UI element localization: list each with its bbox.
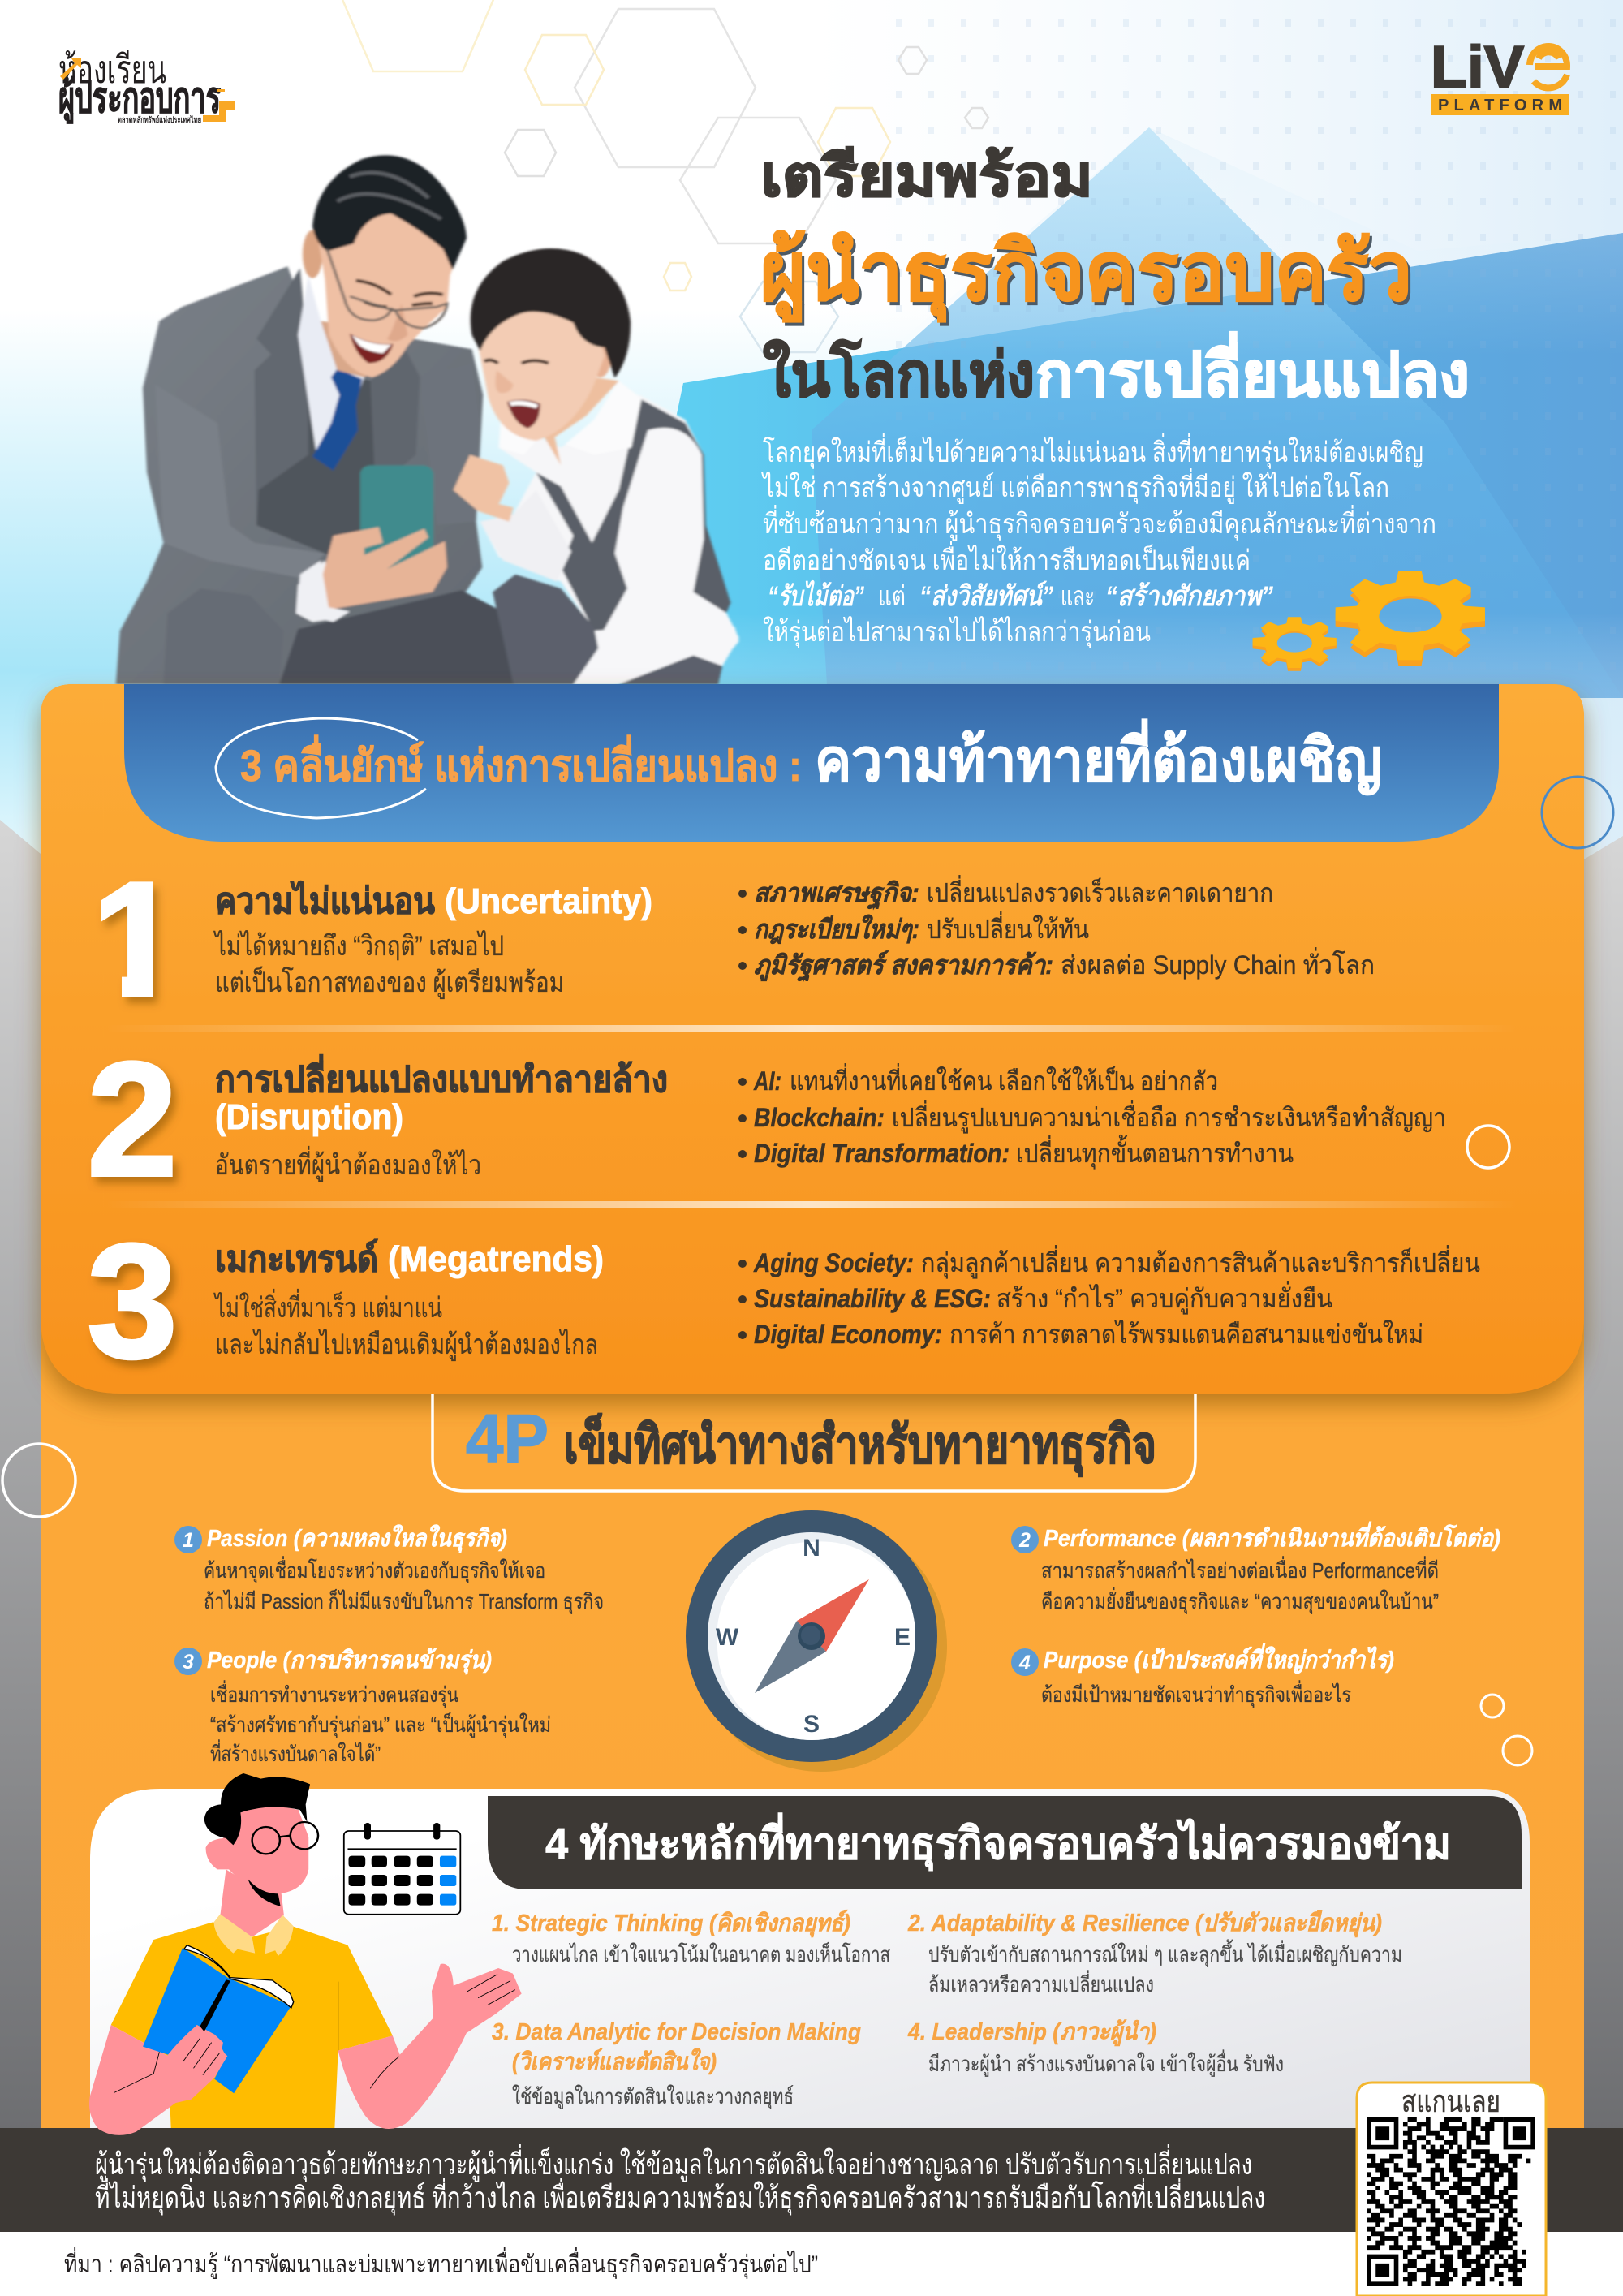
illustration: man with book (89, 1773, 522, 2135)
man glasses (327, 249, 447, 328)
boy fist (454, 454, 514, 522)
row 2: disruption: AI: (753, 1066, 781, 1096)
heading: main title: ผู้นำธุรกิจครอบครัว (760, 226, 1412, 322)
item: passion: Passion (ความหลงใหลในธุรกิจ) (207, 1524, 507, 1553)
heading: main title: เตรียมพร้อม (760, 144, 1093, 208)
row 1: uncertainty: ส่งผลต่อ Supply Chain ทั่วโลก (1061, 947, 1375, 980)
logo: Live Platform: PLATFORM (1438, 97, 1562, 114)
boy hair (471, 248, 631, 378)
skills heading: 4 ทักษะหลักที่ทายาทธุรกิจครอบครัวไม่ควรมองข้าม (545, 1812, 1451, 1872)
summary band: ที่ไม่หยุดนิ่ง และการคิดเชิงกลยุทธ์ ที่กว้างไกล เพื่อเตรียมความพร้อมให้ธุรกิจครอบครัวสามารถรับมือกับโลกที่เปลี่ยนแปลง (95, 2178, 1265, 2216)
boy mouth (507, 399, 540, 429)
row 1: uncertainty (91, 849, 1375, 1030)
blue mountain shapes (617, 16, 1623, 698)
icon: compass (686, 1510, 947, 1772)
row 2: disruption: เปลี่ยนทุกขั้นตอนการทำงาน (1016, 1135, 1294, 1170)
book (143, 1948, 291, 2093)
row 3: megatrends: กลุ่มลูกค้าเปลี่ยน ความต้องการสินค้าและบริการก็เปลี่ยน (921, 1245, 1480, 1279)
intro paragraph: “สร้างศักยภาพ” (1105, 581, 1273, 612)
item: passion (174, 1524, 604, 1614)
left arm (89, 2025, 226, 2135)
item: people: ที่สร้างแรงบันดาลใจได้” (210, 1739, 381, 1766)
intro paragraph: “ส่งวิสัยทัศน์” (919, 580, 1053, 612)
man neck (321, 321, 403, 377)
item: passion: ค้นหาจุดเชื่อมโยงระหว่างตัวเองกับธุรกิจให้เจอ (204, 1556, 545, 1583)
boy ear (590, 342, 610, 377)
boy neck (545, 377, 619, 465)
skill 4 (907, 2019, 1284, 2077)
skill 3: (วิเคราะห์และตัดสินใจ) (512, 2048, 717, 2075)
row 3: megatrends: สร้าง “กำไร” ควบคู่กับความยั่งยืน (997, 1281, 1332, 1315)
skill 3: 3. Data Analytic for Decision Making (492, 2019, 861, 2045)
QR code (1367, 2117, 1535, 2286)
intro paragraph: โลกยุคใหม่ที่เต็มไปด้วยความไม่แน่นอน สิ่งที่ทายาทรุ่นใหม่ต้องเผชิญ (763, 433, 1423, 469)
heading: 4P: เข็มทิศนำทางสำหรับทายาทธุรกิจ (564, 1414, 1156, 1477)
boy collar (499, 381, 642, 454)
boy vest (536, 398, 730, 631)
item: purpose: Purpose (เป้าประสงค์ที่ใหญ่กว่ากำไร) (1044, 1643, 1394, 1674)
logo: Live Platform: LiV (1431, 35, 1524, 100)
row 1: uncertainty: ไม่ได้หมายถึง “วิกฤติ” เสมอไป (213, 930, 504, 962)
intro paragraph: ไม่ใช่ การสร้างจากศูนย์ แต่คือการพาธุรกิจที่มีอยู่ ให้ไปต่อในโลก (761, 468, 1389, 504)
hand on phone (323, 527, 447, 610)
row 3: megatrends: และไม่กลับไปเหมือนเดิมผู้นำต้องมองไกล (215, 1329, 598, 1361)
row 2: disruption: การเปลี่ยนแปลงแบบทำลายล้าง (215, 1054, 668, 1100)
item: passion: 1 (183, 1529, 194, 1552)
phone (360, 465, 433, 569)
row 1: uncertainty: ความไม่แน่นอน (215, 880, 435, 921)
row 3: megatrends (87, 1211, 1480, 1392)
boy nose (495, 370, 514, 393)
man cuff (297, 560, 350, 622)
blue heading band: ความท้าทายที่ต้องเผชิญ (815, 718, 1382, 795)
logo: ห้องเรียนผู้ประกอบการ: ผู้ประกอบการ (58, 75, 221, 124)
skill 2: 2. Adaptability & Resilience (ปรับตัวและยืดหยุ่น) (907, 1910, 1382, 1938)
row 2: disruption: Digital Transformation: (754, 1139, 1010, 1168)
intro paragraph: “รับไม้ต่อ” (768, 579, 864, 612)
item: purpose (1011, 1643, 1394, 1708)
small gear (1253, 617, 1337, 671)
item: performance: สามารถสร้างผลกำไรอย่างต่อเนื่อง Performanceที่ดี (1041, 1556, 1439, 1583)
intro paragraph (761, 433, 1436, 648)
row 2: disruption: (Disruption) (215, 1097, 403, 1137)
boy face (478, 311, 605, 441)
summary band: ผู้นำรุ่นใหม่ต้องติดอาวุธด้วยทักษะภาวะผู้นำที่แข็งแกร่ง ใช้ข้อมูลในการตัดสินใจอย่างชาญฉลาด ปรับตัวรับการเปลี่ยนแปลง (95, 2144, 1252, 2182)
logo: ห้องเรียนผู้ประกอบการ (58, 49, 235, 125)
collar (214, 1914, 294, 1956)
logo: ห้องเรียนผู้ประกอบการ: ตลาดหลักทรัพย์แห่งประเทศไทย (118, 114, 201, 125)
skill 4: มีภาวะผู้นำ สร้างแรงบันดาลใจ เข้าใจผู้อื่น รับฟัง (928, 2049, 1284, 2077)
man tie (312, 368, 362, 471)
glasses (252, 1822, 318, 1854)
decorative circles (2, 777, 1613, 1765)
item: performance: Performance (ผลการดำเนินงานที่ต้องเติบโตต่อ) (1044, 1521, 1500, 1552)
item: people: เชื่อมการทำงานระหว่างคนสองรุ่น (210, 1680, 458, 1708)
skill 3 (492, 2019, 861, 2109)
man suit (116, 266, 515, 684)
neck (220, 1869, 284, 1937)
row 3: megatrends: 3 (87, 1211, 178, 1392)
item: purpose: ต้องมีเป้าหมายชัดเจนว่าทำธุรกิจเพื่ออะไร (1041, 1680, 1351, 1708)
skill 1: วางแผนไกล เข้าใจแนวโน้มในอนาคต มองเห็นโอกาส (512, 1941, 890, 1966)
beard (248, 1879, 281, 1906)
QR card: สแกนเลย (1401, 2085, 1500, 2119)
intro paragraph: และ (1061, 581, 1095, 612)
item: passion: ถ้าไม่มี Passion ก็ไม่มีแรงขับในการ Transform ธุรกิจ (204, 1588, 604, 1614)
row 1: uncertainty: กฎระเบียบใหม่ๆ: (754, 914, 919, 944)
icon: compass: E (894, 1624, 911, 1651)
row 1: uncertainty: แต่เป็นโอกาสทองของ ผู้เตรียมพร้อม (215, 966, 564, 999)
man legs (163, 588, 283, 684)
row 3: megatrends: Sustainability & ESG: (754, 1284, 991, 1313)
man eyes and brows (356, 281, 443, 307)
row 2: disruption: 2 (87, 1029, 178, 1210)
heading: 4P (433, 1394, 1195, 1491)
big gear (1336, 571, 1485, 666)
man waistcoat (256, 364, 375, 557)
icon: compass: S (803, 1711, 820, 1738)
skill 1: 1. Strategic Thinking (คิดเชิงกลยุทธ์) (492, 1910, 850, 1938)
blue heading band: 3 คลื่นยักษ์ แห่งการเปลี่ยนแปลง : (240, 734, 802, 790)
hand drawn ellipse (216, 718, 426, 818)
row 2: disruption: เปลี่ยนรูปแบบความน่าเชื่อถือ การชำระเงินหรือทำสัญญา (892, 1100, 1446, 1134)
hexagon decoration (329, 0, 988, 352)
face (206, 1807, 308, 1893)
man nose (387, 304, 407, 342)
skill 2 (907, 1910, 1402, 1997)
logo: ห้องเรียนผู้ประกอบการ: ห้องเรียน (58, 49, 166, 92)
panel: orange main panel (41, 684, 1584, 2143)
heading: main title (760, 144, 1470, 410)
QR card (1357, 2083, 1546, 2296)
row 1: uncertainty: (Uncertainty) (445, 881, 652, 921)
icon: compass: W (716, 1624, 739, 1651)
row 3: megatrends: Aging Society: (753, 1248, 914, 1277)
skill 3: ใช้ข้อมูลในการตัดสินใจและวางกลยุทธ์ (512, 2084, 794, 2109)
shirt (111, 1922, 393, 2128)
wave panel background (41, 684, 1584, 1394)
row 1: uncertainty: ปรับเปลี่ยนให้ทัน (927, 911, 1089, 944)
row 1: uncertainty: ภูมิรัฐศาสตร์ สงครามการค้า: (754, 950, 1053, 982)
row 1: uncertainty: 1 (91, 849, 182, 1030)
row 3: megatrends: เมกะเทรนด์ (215, 1238, 378, 1279)
white card (90, 1789, 1530, 2143)
right arm (338, 1964, 522, 2129)
intro paragraph: อดีตอย่างชัดเจน เพื่อไม่ให้การสืบทอดเป็นเพียงแค่ (763, 541, 1251, 576)
hair (204, 1773, 310, 1845)
item: performance: คือความยั่งยืนของธุรกิจและ “ความสุขของคนในบ้าน” (1041, 1587, 1439, 1614)
blue heading band (124, 684, 1499, 842)
summary band (0, 2128, 1623, 2232)
row 2: disruption: แทนที่งานที่เคยใช้คน เลือกใช้ให้เป็น อย่ากลัว (790, 1063, 1218, 1096)
item: performance: 2 (1018, 1529, 1031, 1552)
man hair (312, 155, 467, 270)
panel: four skills (90, 1789, 1530, 2143)
item: performance (1011, 1521, 1500, 1614)
row 2: disruption: Blockchain: (754, 1103, 885, 1132)
skill 2: ปรับตัวเข้ากับสถานการณ์ใหม่ ๆ และลุกขึ้น ได้เมื่อเผชิญกับความ (928, 1939, 1402, 1967)
intro paragraph: ให้รุ่นต่อไปสามารถไปได้ไกลกว่ารุ่นก่อน (763, 616, 1151, 648)
boy arm sleeve (480, 490, 571, 581)
row 3: megatrends: การค้า การตลาดไร้พรมแดนคือสนามแข่งขันใหม่ (949, 1320, 1423, 1349)
icon: gears (1253, 571, 1485, 671)
item: people: 3 (183, 1651, 194, 1674)
intro paragraph: ที่ซับซ้อนกว่ามาก ผู้นำธุรกิจครอบครัวจะต้องมีคุณลักษณะที่ต่างจาก (763, 505, 1436, 541)
man ear (303, 230, 322, 278)
heading: main title: การเปลี่ยนแปลง (1035, 331, 1470, 410)
skills heading (488, 1796, 1522, 1889)
row 3: megatrends: (Megatrends) (388, 1239, 604, 1279)
left hand redraw (153, 2025, 227, 2104)
man sleeve shading (155, 385, 325, 578)
skill 2: ล้มเหลวหรือความเปลี่ยนแปลง (928, 1970, 1154, 1997)
man mouth (350, 334, 394, 364)
boy shirt (480, 395, 739, 684)
finger lines (114, 1982, 338, 2092)
man face (319, 209, 462, 377)
intro paragraph: แต่ (878, 581, 906, 612)
item: people: “สร้างศรัทธากับรุ่นก่อน” และ “เป็นผู้นำรุ่นใหม่ (210, 1712, 551, 1738)
boy trousers (493, 575, 598, 684)
row 3: megatrends: ไม่ใช่สิ่งที่มาเร็ว แต่มาแน่ (213, 1289, 442, 1324)
item: people: People (การบริหารคนข้ามรุ่น) (207, 1648, 492, 1675)
skill 1 (492, 1910, 890, 1966)
panel: three waves (41, 684, 1584, 1394)
row 2: disruption: อันตรายที่ผู้นำต้องมองให้ไว (215, 1146, 481, 1182)
boy sleeve (574, 428, 739, 684)
heading: main title: ในโลกแห่ง (763, 338, 1035, 410)
row 1: uncertainty: สภาพเศรษฐกิจ: (754, 878, 919, 910)
man jacket lapels (255, 268, 308, 525)
row 1: uncertainty: เปลี่ยนแปลงรวดเร็วและคาดเดายาก (927, 875, 1273, 907)
icon: calendar (344, 1823, 460, 1915)
skill 4: 4. Leadership (ภาวะผู้นำ) (907, 2019, 1156, 2047)
row 2: disruption (87, 1029, 1446, 1210)
row 3: megatrends: Digital Economy: (754, 1320, 942, 1349)
item: people (174, 1648, 551, 1766)
icon: compass: N (803, 1535, 820, 1562)
photo: father and son looking at a phone (116, 155, 739, 684)
logo: Live Platform (1431, 35, 1569, 115)
heading: 4P: 4P (466, 1401, 549, 1478)
boy eyes (484, 360, 549, 364)
source line: ที่มา : คลิปความรู้ “การพัฒนาและบ่มเพาะทายาทเพื่อขับเคลื่อนธุรกิจครอบครัวรุ่นต่อไป” (64, 2247, 818, 2280)
item: purpose: 4 (1018, 1652, 1031, 1674)
man shirt (298, 275, 364, 454)
